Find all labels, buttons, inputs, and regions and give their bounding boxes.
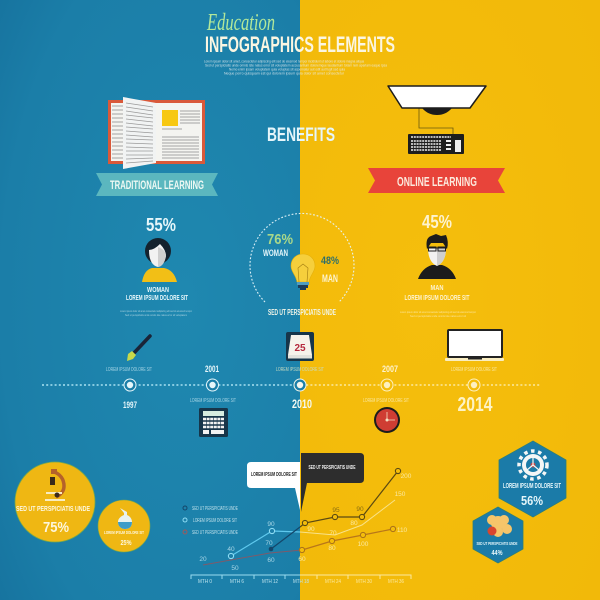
axis labels: MTH 18 — [293, 579, 309, 585]
label: SED UT PERSPICIATIS UNDE — [476, 541, 518, 546]
data labels: 200 — [401, 473, 412, 480]
ribbon: online learning: ONLINE LEARNING — [397, 175, 477, 189]
label: LOREM IPSUM DOLORE SIT — [104, 530, 144, 535]
ribbon: traditional learning: TRADITIONAL LEARNING — [110, 178, 204, 192]
data labels: 80 — [328, 545, 336, 552]
data labels: 90 — [307, 526, 315, 533]
icon: puzzle blob — [487, 515, 512, 537]
legend: SED UT PERSPICIATIS UNDE — [192, 530, 238, 536]
title: script word: Education — [206, 10, 275, 36]
data labels: 90 — [356, 506, 364, 513]
value: 56% — [521, 494, 543, 508]
node 2001 — [206, 379, 218, 391]
stat: man 45%: LOREM IPSUM DOLORE SIT — [404, 293, 470, 302]
year labels: 1997 — [123, 400, 137, 410]
icon: flask — [118, 508, 132, 529]
node 1997 — [124, 379, 136, 391]
legend: LOREM IPSUM DOLORE SIT — [193, 518, 237, 524]
background: blue half — [0, 0, 300, 600]
data labels — [199, 473, 412, 572]
man label: MAN — [322, 273, 338, 285]
year labels: 2014 — [458, 394, 493, 416]
title: main heading: INFOGRAPHICS ELEMENTS — [205, 32, 395, 57]
icon: laptop — [445, 329, 504, 361]
heading: benefits: BENEFITS — [267, 125, 335, 146]
milestone captions: LOREM IPSUM DOLORE SIT — [363, 398, 409, 404]
milestone captions: LOREM IPSUM DOLORE SIT — [190, 398, 236, 404]
title: intro paragraph: Lorem ipsum dolor sit amet, consectetur adipiscing elit sed do eiusmod tempor incididunt ut labore et dolore magna aliqua — [204, 60, 364, 64]
icon: desktop monitor and keyboard — [388, 86, 486, 154]
node 2007 — [381, 379, 393, 391]
data labels: 60 — [267, 557, 275, 564]
node 2014 — [468, 379, 480, 391]
milestone captions — [106, 367, 497, 404]
axis labels: MTH 12 — [262, 579, 278, 585]
series: red — [203, 526, 396, 565]
hexagon stat: 56% — [499, 441, 566, 517]
stat circle: 75% — [15, 462, 95, 542]
icon: desk calendar — [286, 332, 314, 361]
callout: dark bubble: SED UT PERSPICIATIS UNDE — [308, 465, 356, 471]
title: intro paragraph: Nemo enim ipsam voluptatem quia voluptas sit aspernatur aut odit aut fugit sed quia — [229, 68, 345, 72]
icon: woman — [142, 238, 177, 282]
caption: WOMAN — [147, 285, 169, 294]
legend — [183, 506, 238, 536]
value: 75% — [43, 519, 69, 536]
data labels: 80 — [350, 520, 358, 527]
data labels: 150 — [395, 491, 406, 498]
data labels: 20 — [199, 556, 207, 563]
year labels: 2001 — [205, 364, 219, 374]
title: intro paragraph — [204, 60, 387, 76]
data labels: 70 — [329, 530, 337, 537]
title: intro paragraph: Sed ut perspiciatis unde omnis iste natus error sit voluptatem accusantium doloremque laudantium totam rem aperiam eaque ipsa — [205, 64, 387, 68]
timeline — [42, 364, 540, 416]
icon: calculator — [199, 408, 228, 437]
axis labels — [198, 579, 404, 585]
axis labels: MTH 36 — [388, 579, 404, 585]
axis — [191, 575, 300, 579]
data labels: 100 — [358, 541, 369, 548]
label: SED UT PERSPICIATIS UNDE — [16, 504, 90, 513]
data labels: 110 — [397, 527, 408, 534]
data labels: 40 — [227, 546, 235, 553]
value: 25% — [120, 540, 132, 547]
stat: man 45% — [400, 212, 476, 318]
data labels: 60 — [298, 556, 306, 563]
small paragraph — [120, 309, 192, 317]
data labels: 70 — [265, 540, 273, 547]
series: light — [228, 500, 395, 559]
ribbon: traditional learning — [96, 173, 218, 196]
axis labels: MTH 6 — [230, 579, 244, 585]
series: dark — [269, 468, 401, 551]
woman value: 76% — [267, 231, 293, 248]
data labels: 90 — [267, 521, 275, 528]
axis labels: MTH 30 — [356, 579, 372, 585]
icon: wall clock — [374, 407, 400, 433]
data labels: 95 — [332, 507, 340, 514]
icon: microscope — [45, 469, 65, 501]
year labels — [123, 364, 493, 416]
title: intro paragraph: Neque porro quisquam est qui dolorem ipsum quia dolor sit amet consectetur — [224, 72, 345, 76]
center gauge: woman and man with light bulb — [250, 213, 354, 317]
label: LOREM IPSUM DOLORE SIT — [503, 483, 561, 490]
icon: desk calendar: 25 — [294, 343, 306, 354]
data labels: 50 — [231, 565, 239, 572]
man value: 48% — [321, 255, 339, 267]
small paragraph: Lorem ipsum dolor sit amet consectetur adipiscing elit sed do eiusmod tempor — [400, 310, 476, 314]
hexagon stat: 44% — [473, 507, 523, 563]
ribbon: online learning — [368, 168, 505, 193]
milestone captions: LOREM IPSUM DOLORE SIT — [106, 367, 152, 373]
stat circle: 25% — [98, 500, 150, 552]
small paragraph: Sed ut perspiciatis unde omnis iste natus error sit — [410, 314, 466, 318]
year labels: 2007 — [382, 364, 398, 374]
axis labels: MTH 0 — [198, 579, 212, 585]
gauge caption: SED UT PERSPICIATIS UNDE — [268, 308, 336, 317]
icon: open book — [108, 97, 205, 169]
percentage: 45% — [422, 212, 452, 232]
percentage: 55% — [146, 215, 176, 235]
milestone captions: LOREM IPSUM DOLORE SIT — [451, 367, 497, 373]
callout: dark bubble — [301, 453, 364, 512]
small paragraph: Lorem ipsum dolor sit amet consectetur adipiscing elit sed do eiusmod tempor — [120, 309, 192, 313]
line chart — [183, 453, 412, 585]
stat: woman 55% — [120, 215, 192, 317]
value: 44% — [492, 550, 503, 557]
year labels: 2010 — [292, 397, 312, 411]
caption: MAN — [430, 283, 444, 292]
icon: gear — [519, 451, 547, 479]
icon: fountain pen — [127, 336, 150, 361]
small paragraph: Sed ut perspiciatis unde omnis iste natus error sit voluptatem — [125, 313, 187, 317]
icon: light bulb — [291, 254, 315, 290]
axis labels: MTH 24 — [325, 579, 341, 585]
background: yellow half — [300, 0, 600, 600]
callout: white bubble — [247, 462, 300, 510]
title block — [204, 10, 395, 76]
stat: woman 55%: LOREM IPSUM DOLORE SIT — [126, 293, 188, 302]
woman label: WOMAN — [263, 248, 288, 258]
node 2010 — [294, 379, 306, 391]
icon: man — [418, 234, 456, 279]
small paragraph — [400, 310, 476, 318]
dotted arc — [250, 213, 354, 302]
milestone captions: LOREM IPSUM DOLORE SIT — [276, 367, 324, 373]
dotted line — [42, 384, 298, 386]
legend: SED UT PERSPICIATIS UNDE — [192, 506, 238, 512]
callout: white bubble: LOREM IPSUM DOLORE SIT — [251, 472, 297, 478]
